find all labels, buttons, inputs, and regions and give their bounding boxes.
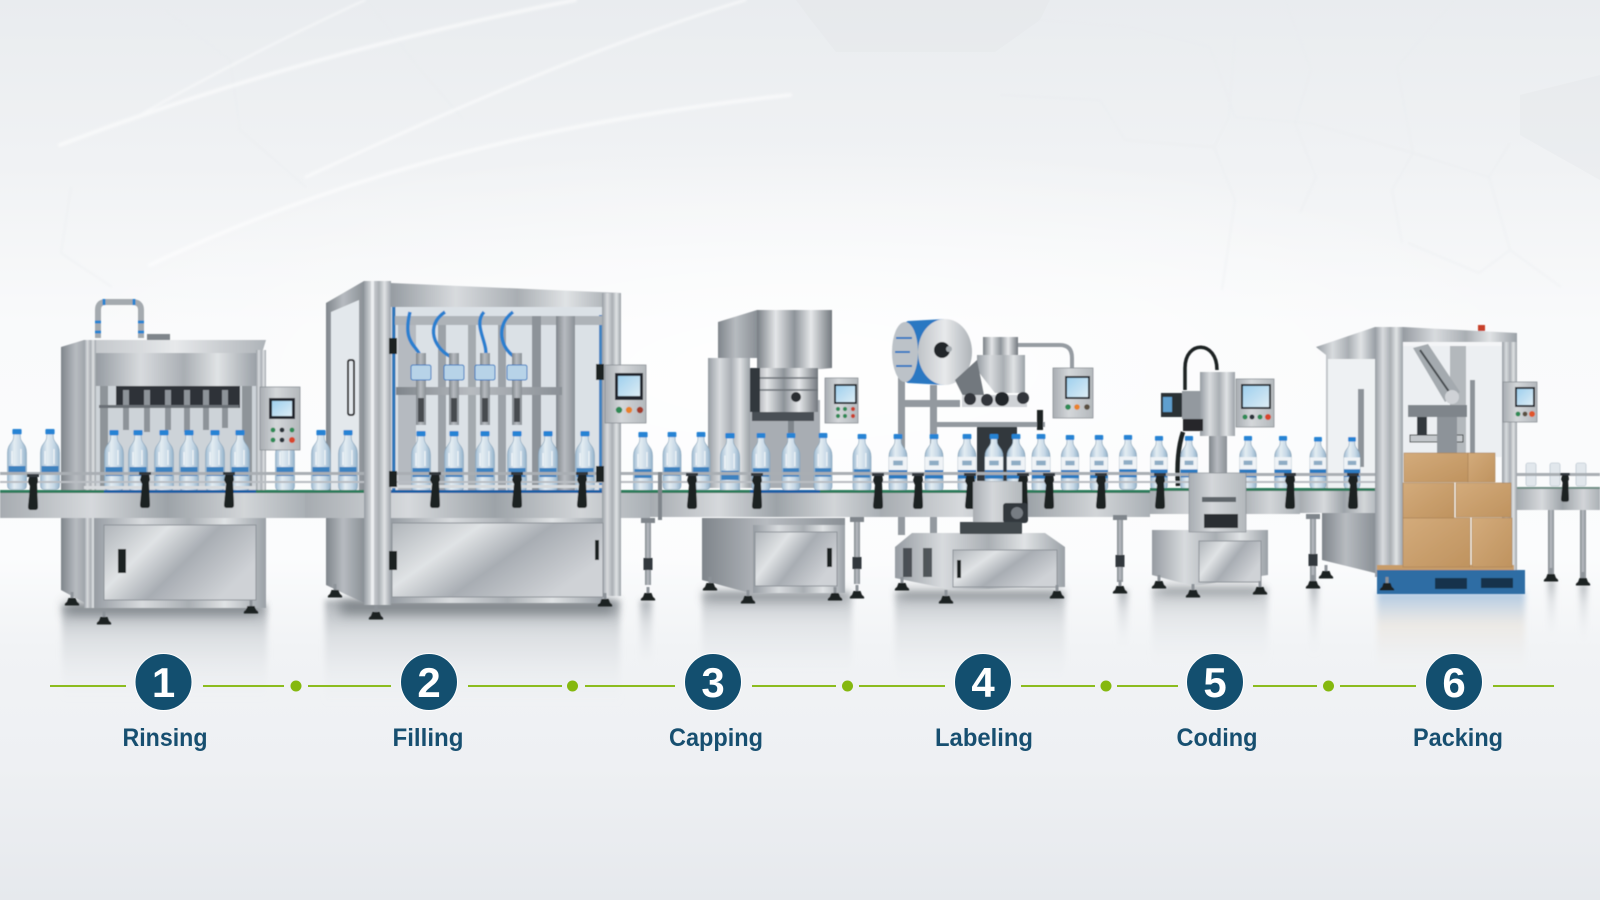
packer interior: [1403, 342, 1503, 457]
process timeline: [50, 654, 1554, 752]
bottles in packing section: [1310, 437, 1360, 488]
capper column: [708, 358, 820, 488]
coding print head and cable: [1161, 347, 1217, 486]
step 5: coding: [1176, 654, 1258, 752]
capper top housing: [718, 310, 832, 370]
step 5: coding: Coding: [1176, 724, 1258, 752]
filler feet: [328, 584, 612, 620]
green connector dots: [290, 680, 1334, 692]
coder base cabinet: [1152, 530, 1268, 586]
rinser feet: [65, 592, 258, 624]
faded output bottles: [1526, 463, 1586, 486]
step 6: packing: [1413, 654, 1503, 752]
filler pillars: [364, 281, 621, 605]
rinser control panel: [260, 387, 300, 450]
step 3: capping: 3: [701, 659, 725, 706]
rinser side panel: [61, 340, 94, 608]
capper rotor: [750, 368, 818, 433]
step 4: labeling: Labeling: [935, 724, 1033, 752]
step 1: rinsing: 1: [152, 659, 175, 706]
step 4: labeling: [935, 654, 1033, 752]
rinser top cap: [84, 340, 266, 353]
step 2: filling: 2: [417, 659, 441, 706]
machine: filling station: [305, 281, 655, 620]
pallet: [1377, 565, 1525, 594]
labeler drive block: [960, 482, 1028, 534]
coding conveyor section: [1150, 473, 1300, 514]
filler glass side panel: [326, 281, 364, 603]
capping conveyor section: [650, 472, 880, 520]
packer frame: [1375, 325, 1517, 577]
capper control panel: [825, 378, 858, 423]
machine: coding station: [1150, 347, 1300, 598]
capper base: [702, 518, 845, 594]
filler cabinet door: [389, 518, 603, 603]
packer side panel: [1316, 327, 1375, 573]
rinser head panel: [96, 353, 256, 386]
rinser interior: [96, 386, 256, 490]
step 5: coding: 5: [1203, 659, 1227, 706]
step 4: labeling: 4: [971, 659, 995, 706]
coder print unit: [1189, 473, 1246, 532]
step 2: filling: Filling: [392, 724, 464, 752]
step 1: rinsing: [122, 654, 208, 752]
step 1: rinsing: Rinsing: [122, 724, 208, 752]
coder feet: [1152, 575, 1267, 598]
filler control panel: [605, 365, 646, 423]
filler interior: [391, 300, 602, 492]
labeler frame posts: [898, 377, 1045, 540]
floor shadows: [65, 586, 1260, 614]
machine: rinsing station: [0, 299, 305, 624]
coder column: [1200, 372, 1235, 482]
production line: [0, 281, 1600, 624]
labeler base: [895, 533, 1065, 590]
packing conveyor section: [1300, 473, 1600, 588]
rinser cabinet door: [94, 518, 266, 608]
labeler control panel: [1053, 368, 1093, 418]
stacked cartons: [1403, 453, 1512, 567]
floor reflections: [62, 580, 1587, 705]
labeled bottles: [889, 434, 1137, 491]
capper feet and leg: [703, 517, 864, 604]
conveyor leg: [641, 518, 655, 600]
labeling head and supply pipe: [955, 337, 1072, 400]
green connector lines: [50, 685, 1554, 687]
step 6: packing: Packing: [1413, 724, 1503, 752]
step 3: capping: Capping: [669, 724, 763, 752]
labeler feet and leg: [895, 515, 1127, 604]
label rollers: [962, 392, 1043, 430]
rinsing water pipe: [95, 299, 170, 341]
filling conveyor section: [305, 472, 650, 518]
filler top beam: [391, 283, 621, 307]
bottles in coding section: [1151, 436, 1291, 489]
step 2: filling: [392, 654, 464, 752]
rinsing conveyor section: [0, 472, 305, 518]
machine: packing station: [1300, 325, 1600, 594]
packer feet: [1319, 565, 1394, 590]
labeler dark column: [977, 427, 1017, 485]
machine: labeling station: [872, 319, 1150, 604]
label reel: [892, 319, 972, 385]
coder control panel: [1236, 379, 1274, 427]
labeling conveyor section: [872, 472, 1150, 517]
step 6: packing: 6: [1442, 659, 1466, 706]
palletizing robot arm: [1408, 344, 1467, 457]
bottles in filling section: [312, 430, 652, 492]
packer control panel: [1503, 382, 1537, 422]
bottles in capping section: [663, 432, 871, 495]
machine: capping station: [650, 310, 880, 604]
step 3: capping: [669, 654, 763, 752]
filling nozzles and blue hoses: [408, 312, 527, 425]
bottles in rinsing section: [8, 429, 294, 490]
